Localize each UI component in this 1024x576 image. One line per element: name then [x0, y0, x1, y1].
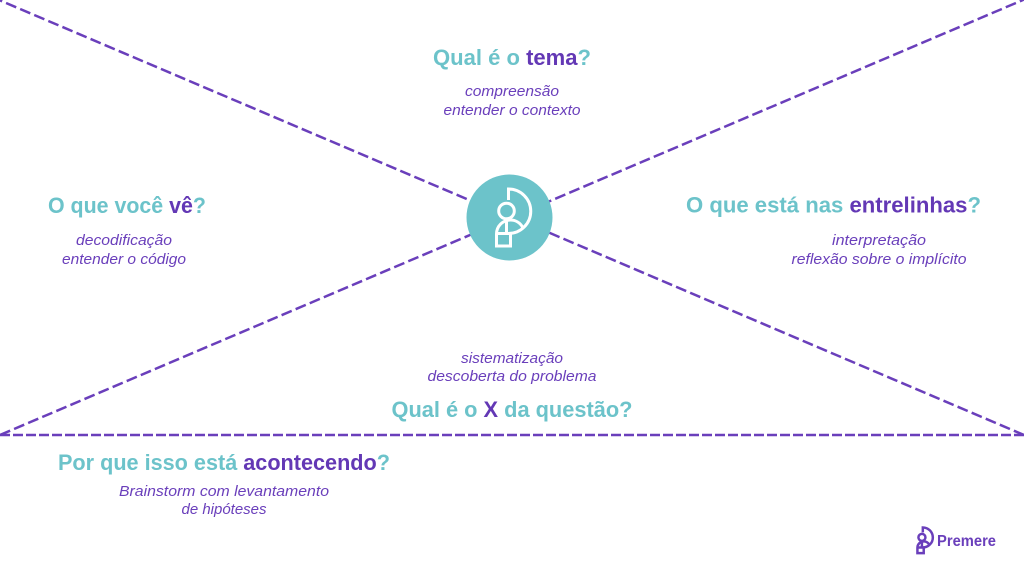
icon: Premere mark	[496, 189, 531, 246]
dashed diagonal: top left to center	[0, 0, 509, 217]
center icon badge	[466, 174, 552, 260]
lower section: acontecendo	[58, 450, 390, 518]
text: entender o contexto: entender o contexto	[444, 102, 580, 119]
Premere logo	[917, 527, 996, 553]
dashed diagonal: bottom right to center	[510, 216, 1024, 435]
heading: Qual é o X da questão?: Qual é o X da questão?	[392, 397, 632, 422]
logo wordmark: Premere	[937, 533, 996, 550]
text: sistematização: sistematização	[461, 350, 563, 367]
right section: entrelinhas	[686, 192, 981, 268]
text: reflexão sobre o implícito: reflexão sobre o implícito	[792, 251, 966, 268]
heading: O que você vê?: O que você vê?	[48, 193, 206, 218]
text: descoberta do problema: descoberta do problema	[428, 368, 596, 385]
text: compreensão: compreensão	[465, 83, 559, 100]
heading: O que está nas entrelinhas?: O que está nas entrelinhas?	[686, 192, 981, 218]
text: de hipóteses: de hipóteses	[182, 501, 267, 518]
top section: tema	[433, 45, 591, 119]
text: Brainstorm com levantamento: Brainstorm com levantamento	[119, 483, 329, 500]
heading: Por que isso está acontecendo?: Por que isso está acontecendo?	[58, 450, 390, 475]
dashed diagonal: bottom left to center	[0, 218, 510, 435]
bottom section: X da questão	[392, 350, 632, 422]
heading: Qual é o tema?: Qual é o tema?	[433, 45, 591, 70]
icon: logo mark	[917, 527, 933, 553]
text: decodificação: decodificação	[76, 232, 172, 249]
text: interpretação: interpretação	[832, 232, 926, 249]
text: entender o código: entender o código	[62, 251, 186, 268]
dashed horizontal divider	[0, 434, 1024, 436]
dashed diagonal: top right to center	[510, 0, 1024, 218]
left section: vê	[48, 193, 206, 268]
